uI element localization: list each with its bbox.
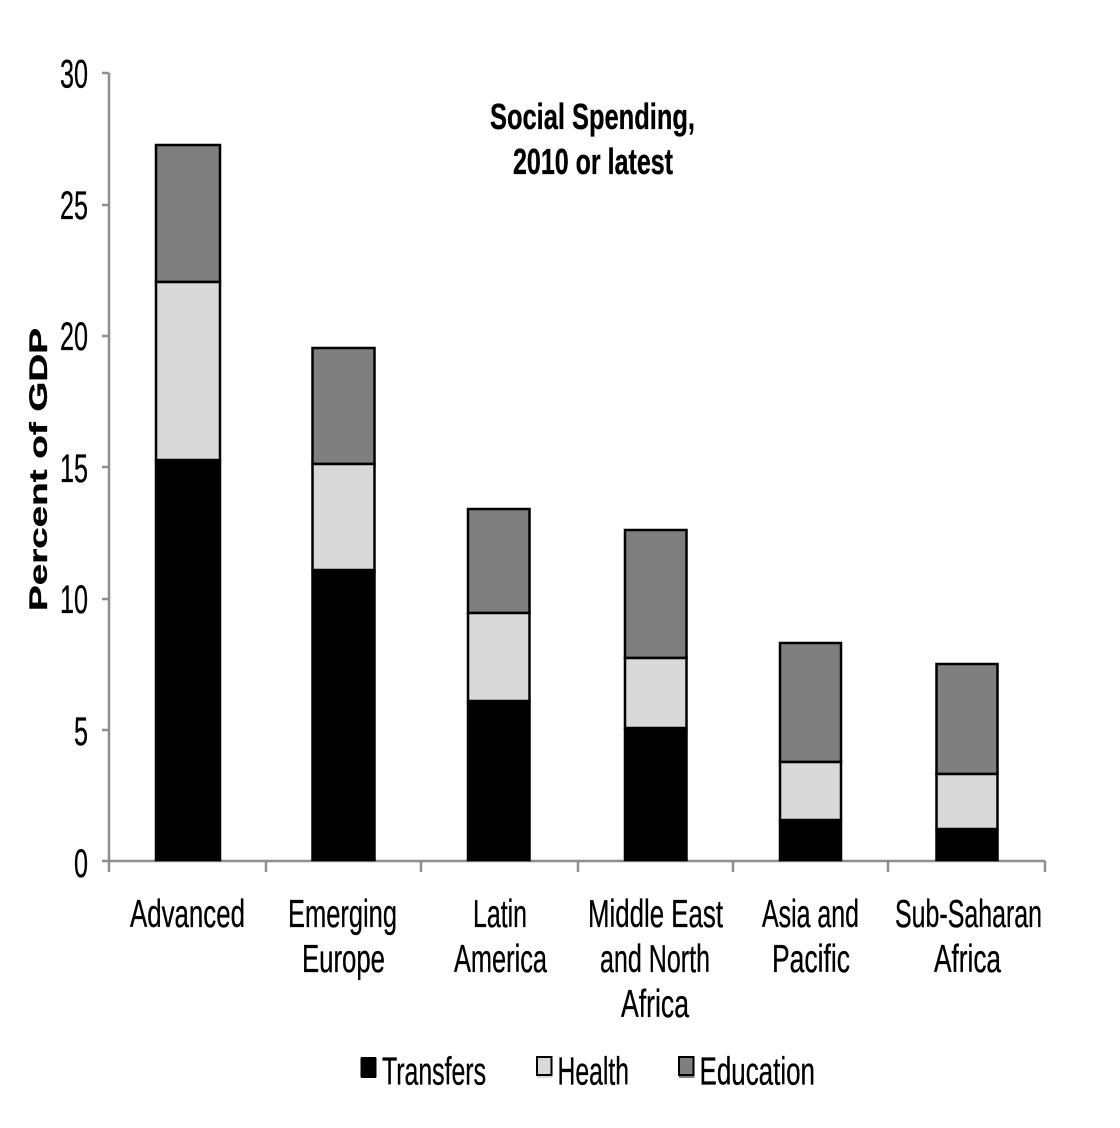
category labels [130, 893, 1042, 1026]
bar: Advanced [156, 145, 220, 860]
category labels: Latin [473, 893, 527, 936]
y axis tick labels: 5 [74, 710, 88, 754]
category labels: Sub-Saharan [895, 893, 1042, 936]
category labels: America [454, 938, 547, 981]
bar: Emerging Europe [312, 348, 374, 860]
category labels: Africa [934, 938, 1001, 981]
legend item: Transfers [360, 1050, 486, 1094]
chart title: Social Spending, [490, 96, 695, 137]
x axis [102, 861, 1045, 872]
bar: Asia and Pacific [780, 643, 841, 860]
y axis tick labels: 10 [60, 578, 88, 622]
y axis [102, 73, 109, 861]
category labels: Asia and [762, 893, 859, 936]
category labels: Emerging [288, 893, 397, 936]
category labels: Africa [621, 983, 689, 1026]
y axis tick labels: 25 [60, 184, 88, 228]
bar: Latin America [468, 509, 530, 860]
category labels: and North [600, 938, 710, 981]
legend item: Health: Health [558, 1050, 629, 1094]
category labels: Europe [302, 938, 385, 981]
y axis tick labels: 30 [60, 52, 88, 96]
bar: Sub-Saharan Africa [936, 664, 998, 860]
y axis tick labels: 0 [74, 842, 88, 886]
chart title [490, 96, 695, 182]
legend item: Education: Education [700, 1050, 815, 1094]
y axis tick labels: 15 [60, 447, 88, 491]
category labels: Middle East [588, 893, 723, 936]
chart title: 2010 or latest [513, 141, 673, 182]
category labels: Pacific [772, 938, 850, 981]
y axis title: Percent of GDP [25, 328, 53, 611]
legend item: Transfers: Transfers [382, 1050, 486, 1094]
y axis tick labels: 20 [60, 315, 88, 359]
bar: Middle East and North Africa [625, 530, 686, 860]
legend item: Health [537, 1050, 629, 1094]
category labels: Advanced [130, 893, 245, 936]
legend [360, 1050, 815, 1094]
y axis tick labels [60, 52, 88, 886]
legend item: Education [679, 1050, 815, 1094]
